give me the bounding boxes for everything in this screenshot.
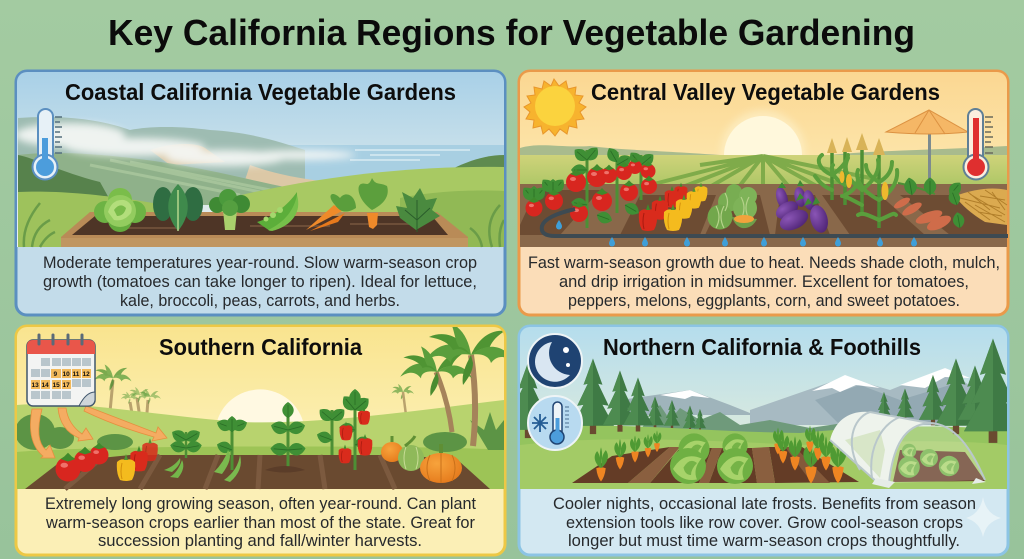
fruiting pepper plant bbox=[315, 389, 372, 470]
icon: lettuce bbox=[94, 188, 146, 232]
description: and drip irrigation in midsummer. Excellent for tomatoes, bbox=[559, 273, 969, 291]
heading: Central Valley Vegetable Gardens bbox=[591, 79, 940, 105]
heading: Southern California bbox=[159, 334, 362, 360]
description bbox=[45, 495, 476, 550]
description bbox=[43, 254, 477, 310]
description: warm-season crops earlier than most of the state. Great for bbox=[45, 514, 475, 532]
description bbox=[528, 254, 1000, 310]
icon: pea pods bbox=[257, 192, 298, 231]
eggplants bbox=[773, 180, 831, 235]
seedling with beans bbox=[164, 427, 203, 478]
description: Fast warm-season growth due to heat. Needs shade cloth, mulch, bbox=[528, 254, 1000, 272]
tomatoes bbox=[56, 443, 108, 482]
bean plant bbox=[214, 416, 249, 482]
grass tufts bbox=[24, 203, 504, 247]
description: peppers, melons, eggplants, corn, and sweet potatoes. bbox=[568, 292, 960, 310]
icon: planting calendar: 13 bbox=[32, 382, 39, 389]
title: Key California Regions for Vegetable Gardening bbox=[108, 12, 915, 53]
coastal scene illustration bbox=[15, 72, 505, 247]
icon: planting calendar: 9 bbox=[54, 371, 58, 378]
icon: moon night bbox=[528, 334, 582, 388]
icon: herb bbox=[396, 188, 440, 232]
icon: kale bbox=[153, 184, 203, 231]
description: succession planting and fall/winter harvests. bbox=[98, 532, 422, 550]
description: longer but must time warm-season crops thoughtfully. bbox=[568, 532, 960, 550]
panel: southern California bbox=[15, 323, 515, 555]
cabbages bbox=[670, 433, 753, 484]
raised garden bed bbox=[61, 212, 468, 247]
panel: coastal California bbox=[15, 71, 505, 315]
sparkle bbox=[966, 497, 1001, 537]
icon: sun bbox=[524, 79, 586, 136]
icon: thermometer hot bbox=[964, 109, 993, 180]
panel: central valley bbox=[519, 71, 1008, 315]
young pepper plant bbox=[265, 402, 307, 472]
carrots row left bbox=[595, 430, 661, 482]
melons bbox=[708, 184, 757, 230]
icon: planting calendar: 15 bbox=[52, 382, 60, 389]
icon: broccoli bbox=[209, 189, 250, 230]
peppers bbox=[117, 438, 158, 481]
heading: Northern California & Foothills bbox=[603, 334, 921, 360]
icon: thermometer cool bbox=[32, 109, 62, 180]
peppers bbox=[639, 182, 707, 231]
icon: planting calendar bbox=[27, 335, 95, 406]
icon: planting calendar: 14 bbox=[42, 382, 49, 389]
pumpkins bbox=[381, 436, 462, 483]
drip irrigation line bbox=[542, 209, 1008, 246]
description: growth (tomatoes can take longer to ripen). Ideal for lettuce, bbox=[43, 273, 477, 291]
description: kale, broccoli, peas, carrots, and herbs. bbox=[120, 292, 400, 310]
tomato plants bbox=[519, 144, 657, 228]
sweet potatoes and mulch bbox=[892, 177, 1007, 233]
umbrella shade cloth bbox=[886, 110, 968, 190]
description: Extremely long growing season, often year-round. Can plant bbox=[45, 495, 476, 513]
garden beds bbox=[572, 447, 859, 483]
northern California scene illustration bbox=[507, 327, 1022, 489]
description bbox=[553, 495, 976, 550]
icon: planting calendar: 11 bbox=[72, 371, 80, 378]
icon: planting calendar: 17 bbox=[62, 382, 70, 389]
arrows from calendar to crops bbox=[30, 406, 167, 458]
description: Cooler nights, occasional late frosts. Benefits from season bbox=[553, 495, 976, 513]
icon: planting calendar: 10 bbox=[62, 371, 70, 378]
description: extension tools like row cover. Grow cool-season crops bbox=[566, 514, 963, 532]
icon: carrot with leaves bbox=[359, 178, 388, 229]
icon: frost thermometer bbox=[528, 396, 582, 450]
icon: carrots bbox=[306, 194, 356, 231]
southern California scene illustration bbox=[15, 323, 515, 489]
hoop tunnel row cover bbox=[830, 412, 986, 488]
carrots rows right bbox=[773, 426, 846, 484]
icon: planting calendar: 12 bbox=[82, 371, 90, 378]
central valley scene illustration bbox=[520, 72, 1007, 247]
description: Moderate temperatures year-round. Slow warm-season crop bbox=[43, 254, 477, 272]
heading: Coastal California Vegetable Gardens bbox=[65, 79, 456, 105]
panel: northern California and foothills bbox=[507, 326, 1022, 555]
corn plants bbox=[815, 133, 897, 228]
